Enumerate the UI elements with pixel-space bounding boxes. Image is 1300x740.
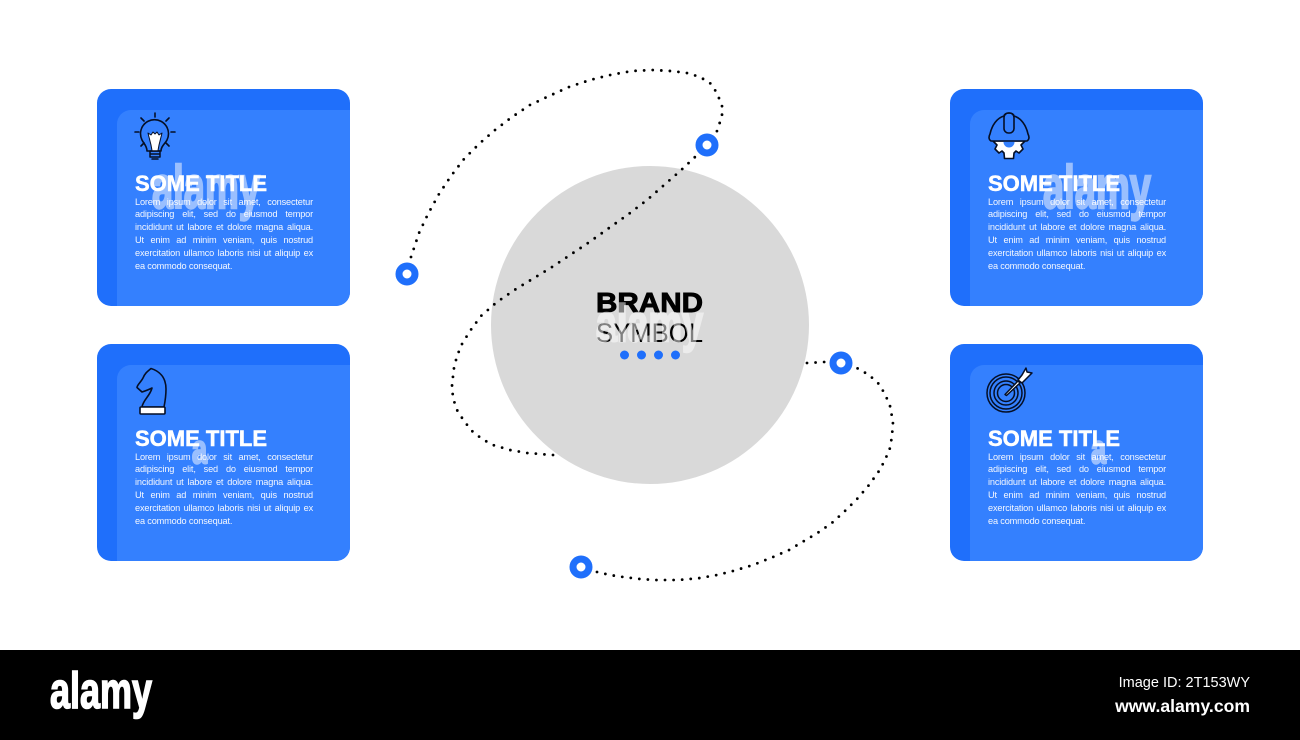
panel: top right card: [950, 89, 1203, 306]
heading: SOME TITLE: [135, 426, 267, 451]
panel: bottom left card: [97, 344, 350, 561]
text block: Lorem ipsum dolor sit amet, consectetur: [135, 196, 313, 206]
watermark overlays: a: [1091, 428, 1107, 472]
text block: ea commodo consequat.: [988, 516, 1085, 526]
text block: incididunt ut labore et dolore magna aliqua.: [988, 222, 1166, 232]
panel: bottom right card: [950, 344, 1203, 561]
text block: incididunt ut labore et dolore magna aliqua.: [135, 222, 313, 232]
brand symbol text: SYMBOL: [596, 318, 703, 348]
four blue dots: [620, 350, 680, 360]
icon: light bulb: [134, 112, 176, 160]
dotted path: upper arc and S-curve: [411, 70, 722, 455]
node: right: [833, 355, 849, 371]
icon: chess knight: [136, 368, 167, 415]
node: left: [399, 266, 415, 282]
text block: incididunt ut labore et dolore magna aliqua.: [135, 477, 313, 487]
watermark overlays: alamy: [596, 295, 703, 353]
text block: adipiscing elit, sed do eiusmod tempor: [988, 464, 1166, 474]
brand symbol text: BRAND: [596, 287, 703, 318]
dotted path: lower arc: [597, 362, 893, 580]
heading: SOME TITLE: [135, 171, 267, 196]
heading: SOME TITLE: [988, 426, 1120, 451]
text block: ea commodo consequat.: [135, 516, 232, 526]
text block: ea commodo consequat.: [135, 261, 232, 271]
watermark overlays: alamy: [1043, 154, 1151, 221]
text block: Ut enim ad minim veniam, quis nostrud: [135, 490, 313, 500]
text block: Lorem ipsum dolor sit amet, consectetur: [988, 452, 1166, 462]
text block: Lorem ipsum dolor sit amet, consectetur: [988, 196, 1166, 206]
watermark overlays: a: [192, 428, 208, 472]
text block: [135, 196, 314, 271]
text block: Ut enim ad minim veniam, quis nostrud: [988, 490, 1166, 500]
text block: Ut enim ad minim veniam, quis nostrud: [988, 235, 1166, 245]
text block: [988, 452, 1166, 526]
brand symbol text: [596, 287, 703, 348]
image id and site: [1115, 675, 1250, 716]
text block: exercitation ullamco laboris nisi ut aliquip ex: [135, 503, 313, 513]
central grey circle: [491, 166, 809, 484]
watermark overlays: alamy: [152, 154, 260, 221]
node: bottom: [573, 559, 589, 575]
text block: ea commodo consequat.: [988, 261, 1085, 271]
heading: SOME TITLE: [988, 171, 1120, 196]
text block: Ut enim ad minim veniam, quis nostrud: [135, 235, 313, 245]
icon: helmet with gear: [988, 112, 1030, 160]
text block: exercitation ullamco laboris nisi ut aliquip ex: [988, 248, 1166, 258]
icon: target with dart: [986, 367, 1033, 413]
text block: incididunt ut labore et dolore magna aliqua.: [988, 477, 1166, 487]
text block: Lorem ipsum dolor sit amet, consectetur: [135, 452, 313, 462]
panel: top left card: [97, 89, 350, 306]
text block: exercitation ullamco laboris nisi ut aliquip ex: [135, 248, 313, 258]
image id and site: www.alamy.com: [1115, 696, 1250, 716]
image id and site: Image ID: 2T153WY: [1119, 675, 1250, 691]
footer bar: [0, 650, 1300, 740]
text block: adipiscing elit, sed do eiusmod tempor: [135, 464, 313, 474]
text block: exercitation ullamco laboris nisi ut aliquip ex: [988, 503, 1166, 513]
text block: [135, 452, 314, 526]
text block: [988, 196, 1166, 271]
footer logo: alamy: [50, 662, 152, 719]
node: upper right: [699, 137, 715, 153]
text block: adipiscing elit, sed do eiusmod tempor: [135, 209, 313, 219]
text block: adipiscing elit, sed do eiusmod tempor: [988, 209, 1166, 219]
